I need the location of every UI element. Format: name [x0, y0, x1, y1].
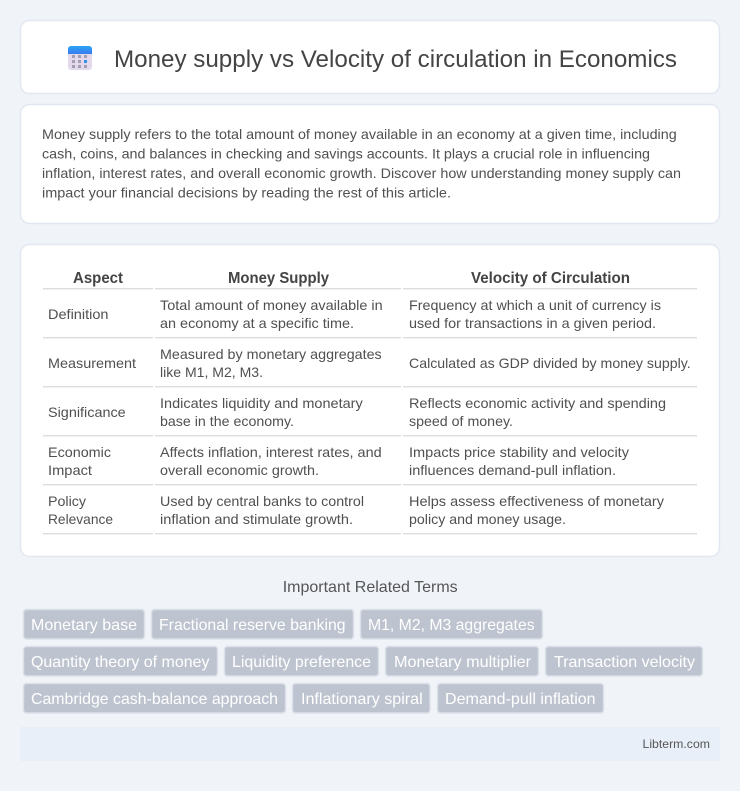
header panel: [20, 20, 720, 94]
row: economic impact: overall economic growth.: [160, 462, 319, 478]
icon: calendar: [68, 46, 92, 70]
tag: Cambridge cash-balance approach: Cambridge cash-balance approach: [31, 691, 278, 708]
footer credit: Libterm.com: [642, 737, 710, 751]
panel: introduction: [20, 104, 720, 224]
tag: Quantity theory of money: [24, 646, 218, 676]
tag: Quantity theory of money: Quantity theory of money: [31, 654, 210, 671]
row: policy relevance: policy and money usage.: [409, 511, 566, 527]
tag: Liquidity preference: [224, 646, 378, 676]
row: significance: Indicates liquidity and monetary: [160, 395, 363, 411]
intro paragraph: [42, 126, 681, 200]
row: definition: Frequency at which a unit of currency is: [409, 297, 661, 313]
row: policy relevance: Policy: [48, 493, 86, 509]
tag: Fractional reserve banking: [152, 610, 354, 639]
related terms tags: [24, 610, 702, 713]
intro paragraph: Money supply refers to the total amount of money available in an economy at a given time, including: [42, 126, 677, 142]
footer bar: [20, 727, 720, 761]
tag: Monetary multiplier: [386, 646, 538, 676]
row: policy relevance: Used by central banks to control: [160, 493, 364, 509]
intro paragraph: impact your financial decisions by reading the rest of this article.: [42, 184, 451, 200]
tag: Demand-pull inflation: [438, 684, 604, 713]
title: Money supply vs Velocity of circulation in Economics: [114, 46, 677, 73]
row: policy relevance: Helps assess effectiveness of monetary: [409, 493, 664, 509]
tag: Inflationary spiral: [292, 684, 430, 713]
table header row: Velocity of Circulation: [471, 270, 630, 287]
tag: Monetary base: Monetary base: [31, 617, 137, 634]
row: definition: Total amount of money available in: [160, 297, 383, 313]
tag: Monetary multiplier: Monetary multiplier: [394, 654, 532, 671]
table header row: Money Supply: [228, 270, 329, 287]
tag: Transaction velocity: [546, 646, 702, 676]
tag: Cambridge cash-balance approach: [24, 684, 286, 713]
row: significance: [43, 395, 697, 436]
row: definition: [43, 297, 697, 338]
tag: M1, M2, M3 aggregates: [360, 610, 542, 639]
tag: Transaction velocity: Transaction velocity: [554, 654, 695, 671]
row: economic impact: Impacts price stability and velocity: [409, 444, 629, 460]
row: measurement: [43, 346, 697, 387]
intro paragraph: cash, coins, and balances in checking and savings accounts. It plays a crucial role in influencing: [42, 145, 650, 161]
row: policy relevance: [43, 493, 697, 534]
panel: comparison table: [20, 244, 720, 556]
intro paragraph: inflation, interest rates, and overall economic growth. Discover how understanding money supply can: [42, 165, 681, 181]
row: significance: speed of money.: [409, 413, 513, 429]
tag: Inflationary spiral: Inflationary spiral: [301, 691, 423, 708]
row: significance: Reflects economic activity and spending: [409, 395, 666, 411]
row: definition: an economy at a specific time.: [160, 315, 354, 331]
row: measurement: Measured by monetary aggregates: [160, 346, 382, 362]
row: significance: base in the economy.: [160, 413, 294, 429]
row: significance: Significance: [48, 404, 126, 420]
row: measurement: Calculated as GDP divided by money supply.: [409, 355, 691, 371]
tag: Fractional reserve banking: Fractional reserve banking: [159, 617, 346, 634]
row: policy relevance: inflation and stimulate growth.: [160, 511, 353, 527]
tag: Monetary base: [24, 610, 144, 639]
table header row: [43, 270, 697, 289]
row: economic impact: influences demand-pull inflation.: [409, 462, 616, 478]
row: definition: used for transactions in a given period.: [409, 315, 656, 331]
tag: Liquidity preference: Liquidity preference: [232, 654, 371, 671]
tag: M1, M2, M3 aggregates: M1, M2, M3 aggregates: [368, 617, 535, 634]
row: economic impact: Impact: [48, 462, 92, 478]
row: measurement: like M1, M2, M3.: [160, 364, 263, 380]
tag: Demand-pull inflation: Demand-pull inflation: [445, 691, 596, 708]
table header row: Aspect: [73, 270, 124, 287]
row: economic impact: Affects inflation, interest rates, and: [160, 444, 382, 460]
row: economic impact: Economic: [48, 444, 111, 460]
row: definition: Definition: [48, 306, 108, 322]
row: economic impact: [43, 444, 697, 485]
related terms heading: Important Related Terms: [283, 579, 458, 596]
row: policy relevance: Relevance: [48, 511, 113, 527]
row: measurement: Measurement: [48, 355, 136, 371]
